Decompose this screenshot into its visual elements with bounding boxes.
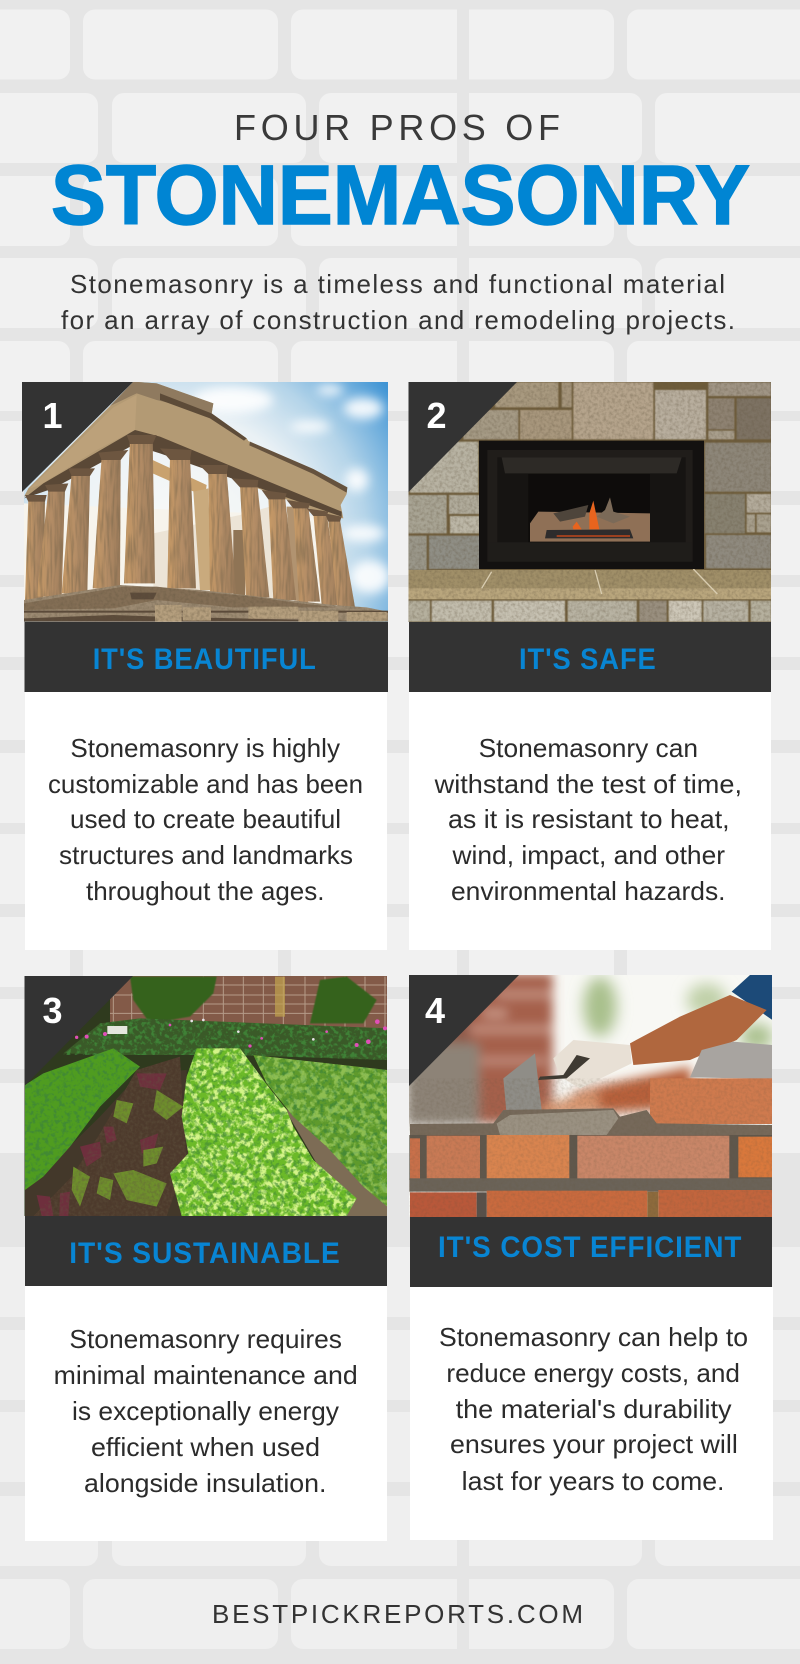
panel: it's beautiful	[20, 380, 390, 950]
description text: reduce energy costs, and	[446, 1358, 740, 1388]
description text: Stonemasonry can help to	[439, 1322, 748, 1352]
description text	[48, 733, 363, 906]
logs and flames	[530, 512, 650, 542]
title bar	[24, 622, 388, 692]
trowel	[503, 1053, 542, 1115]
description card	[409, 692, 771, 950]
photo: greek temple	[20, 380, 390, 623]
bottom bricks	[410, 1192, 477, 1218]
description text: minimal maintenance and	[54, 1360, 358, 1390]
white glove	[553, 1040, 632, 1088]
steps	[24, 585, 388, 622]
triangle badge	[409, 975, 519, 1086]
number 1: 1	[42, 395, 63, 436]
description text: Stonemasonry is highly	[70, 733, 340, 763]
brick wall with trellis	[110, 976, 388, 1033]
heading: IT'S SUSTAINABLE	[69, 1237, 341, 1270]
number 3: 3	[42, 990, 63, 1031]
description text: used to create beautiful	[70, 804, 341, 834]
left bed	[25, 1048, 140, 1190]
description text: customizable and has been	[48, 769, 363, 799]
footer: website: BESTPICKREPORTS.COM	[212, 1599, 583, 1629]
description text: throughout the ages.	[86, 876, 324, 906]
heading: IT'S BEAUTIFUL	[93, 643, 317, 676]
firebox	[479, 441, 704, 569]
description text: the material's durability	[456, 1394, 732, 1424]
number 2: 2	[426, 395, 447, 436]
description text: last for years to come.	[462, 1466, 724, 1496]
title: stonemasonry: STONEMASONRY	[51, 148, 750, 242]
intro text: Stonemasonry is a timeless and functional material	[70, 269, 725, 299]
description card	[25, 1286, 387, 1541]
description text: alongside insulation.	[84, 1468, 326, 1498]
sleeve	[732, 975, 772, 1020]
grey glove	[690, 1042, 772, 1079]
description text: is exceptionally energy	[72, 1396, 339, 1426]
title: four pros of: FOUR PROS OF	[234, 107, 560, 148]
description text: structures and landmarks	[59, 840, 353, 870]
lettuce row	[170, 1048, 357, 1216]
hearth	[408, 570, 771, 590]
description text: environmental hazards.	[451, 876, 726, 906]
intro text	[61, 269, 735, 335]
top brick	[650, 1078, 772, 1124]
photo: vegetable garden	[23, 975, 388, 1217]
photo: bricklaying	[407, 973, 775, 1220]
heading: IT'S COST EFFICIENT	[438, 1231, 742, 1264]
description text	[434, 733, 742, 906]
chard row	[33, 1057, 187, 1216]
triangle badge	[24, 976, 133, 1086]
triangle badge	[408, 382, 517, 492]
description text	[54, 1324, 358, 1498]
intro text: for an array of construction and remodeling projects.	[61, 305, 735, 335]
description text: Stonemasonry can	[479, 733, 698, 763]
mortar	[410, 1108, 772, 1137]
arm	[630, 995, 767, 1065]
brick row	[409, 1135, 773, 1180]
title bar	[409, 622, 771, 692]
soil	[25, 1070, 190, 1216]
description text: Stonemasonry requires	[69, 1324, 342, 1354]
panel: it's sustainable	[23, 975, 388, 1541]
title bar	[25, 1216, 387, 1286]
number 4: 4	[425, 990, 445, 1031]
description text: wind, impact, and other	[451, 840, 725, 870]
description text: withstand the test of time,	[434, 769, 742, 799]
building mass	[24, 382, 347, 518]
panel: it's cost efficient	[407, 973, 775, 1540]
description text: ensures your project will	[450, 1429, 738, 1459]
capitals	[25, 435, 342, 522]
flower bed	[63, 1018, 387, 1060]
panel: it's safe	[407, 380, 773, 950]
description text	[439, 1322, 748, 1496]
right bed	[253, 1055, 387, 1207]
photo: stone fireplace	[407, 380, 773, 623]
description text: efficient when used	[91, 1432, 320, 1462]
heading: IT'S SAFE	[519, 643, 657, 676]
description text: as it is resistant to heat,	[448, 804, 730, 834]
description card	[25, 692, 387, 950]
description card	[410, 1287, 773, 1540]
triangle badge	[22, 382, 133, 492]
title bar	[410, 1217, 772, 1287]
